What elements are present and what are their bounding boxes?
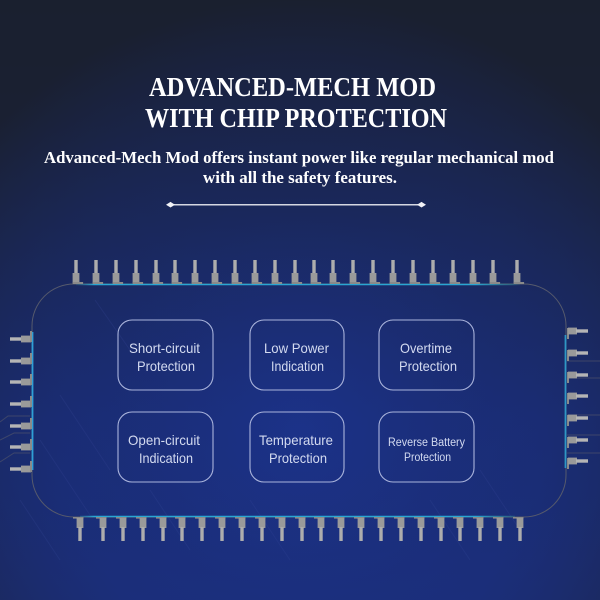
card: temperature protection	[250, 412, 344, 482]
bottom pins	[73, 517, 524, 541]
left pins	[10, 331, 32, 472]
card: low power indication: Low Power	[264, 340, 329, 356]
card: short-circuit protection: Short-circuit	[129, 340, 200, 356]
card: temperature protection: Temperature	[259, 432, 333, 448]
subtitle text	[44, 148, 554, 187]
top pins	[73, 260, 524, 284]
card: open-circuit indication: Open-circuit	[128, 432, 200, 448]
subtitle text: with all the safety features.	[203, 168, 397, 187]
card: reverse battery protection: Reverse Battery	[388, 437, 465, 449]
title: ADVANCED-MECH MOD	[149, 72, 436, 102]
card: low power indication: Indication	[271, 358, 324, 374]
card: overtime protection: Overtime	[400, 340, 452, 356]
right pins	[567, 328, 588, 469]
card: reverse battery protection	[379, 412, 474, 482]
card: short-circuit protection: Protection	[137, 358, 195, 374]
faint trace lines	[0, 361, 600, 462]
card: reverse battery protection: Protection	[404, 452, 451, 464]
title: WITH CHIP PROTECTION	[145, 103, 447, 133]
title	[145, 72, 447, 133]
card: overtime protection	[379, 320, 474, 390]
chip outline	[32, 284, 566, 517]
card: temperature protection: Protection	[269, 450, 327, 466]
card: overtime protection: Protection	[399, 358, 457, 374]
subtitle text: Advanced-Mech Mod offers instant power like regular mechanical mod	[44, 148, 554, 167]
card: low power indication	[250, 320, 344, 390]
card: open-circuit indication: Indication	[139, 450, 193, 466]
card: short-circuit protection	[118, 320, 213, 390]
double-headed arrow	[166, 202, 426, 208]
card: open-circuit indication	[118, 412, 213, 482]
